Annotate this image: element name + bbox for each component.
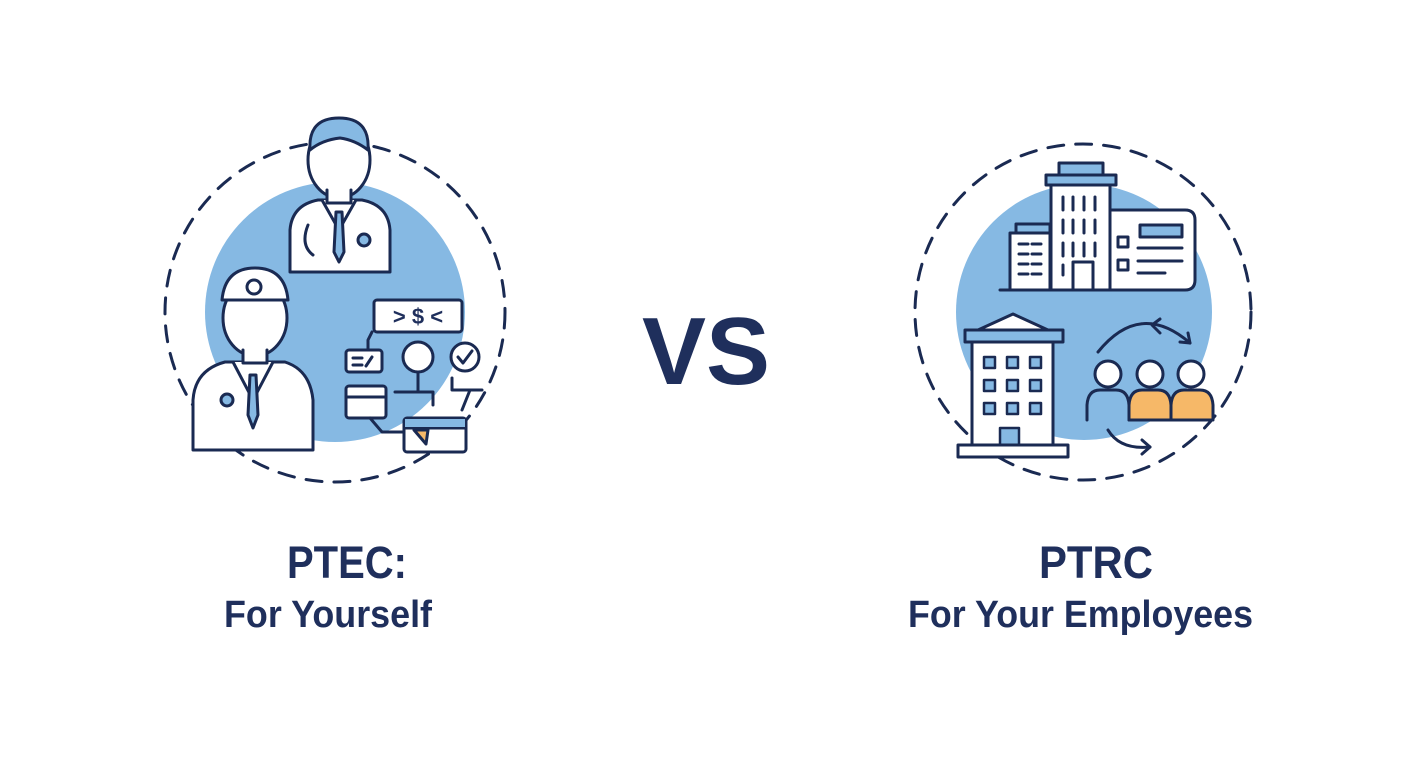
subtitle: For Your Employees: For Your Employees [908, 594, 1253, 636]
dashed ring left [165, 142, 505, 482]
icon: top doctor [290, 118, 390, 272]
icon: employees rotation [1087, 319, 1213, 454]
subtitle: For Yourself: For Yourself [224, 594, 432, 636]
icon: classic building [958, 314, 1068, 457]
dashed ring right [915, 144, 1251, 480]
blue disc right [956, 184, 1212, 440]
blue disc left [205, 182, 465, 442]
icon: bottom doctor [193, 268, 313, 450]
icon: finance flow: > $ < [393, 304, 443, 329]
panel: PTRC icon [915, 144, 1251, 480]
icon: office buildings [1000, 163, 1195, 290]
VS heading: VS [642, 298, 770, 405]
icon: finance flow [346, 300, 482, 452]
title: PTEC: PTEC: [287, 537, 407, 588]
title: PTRC: PTRC [1039, 537, 1153, 588]
panel: PTEC icon [165, 118, 505, 482]
